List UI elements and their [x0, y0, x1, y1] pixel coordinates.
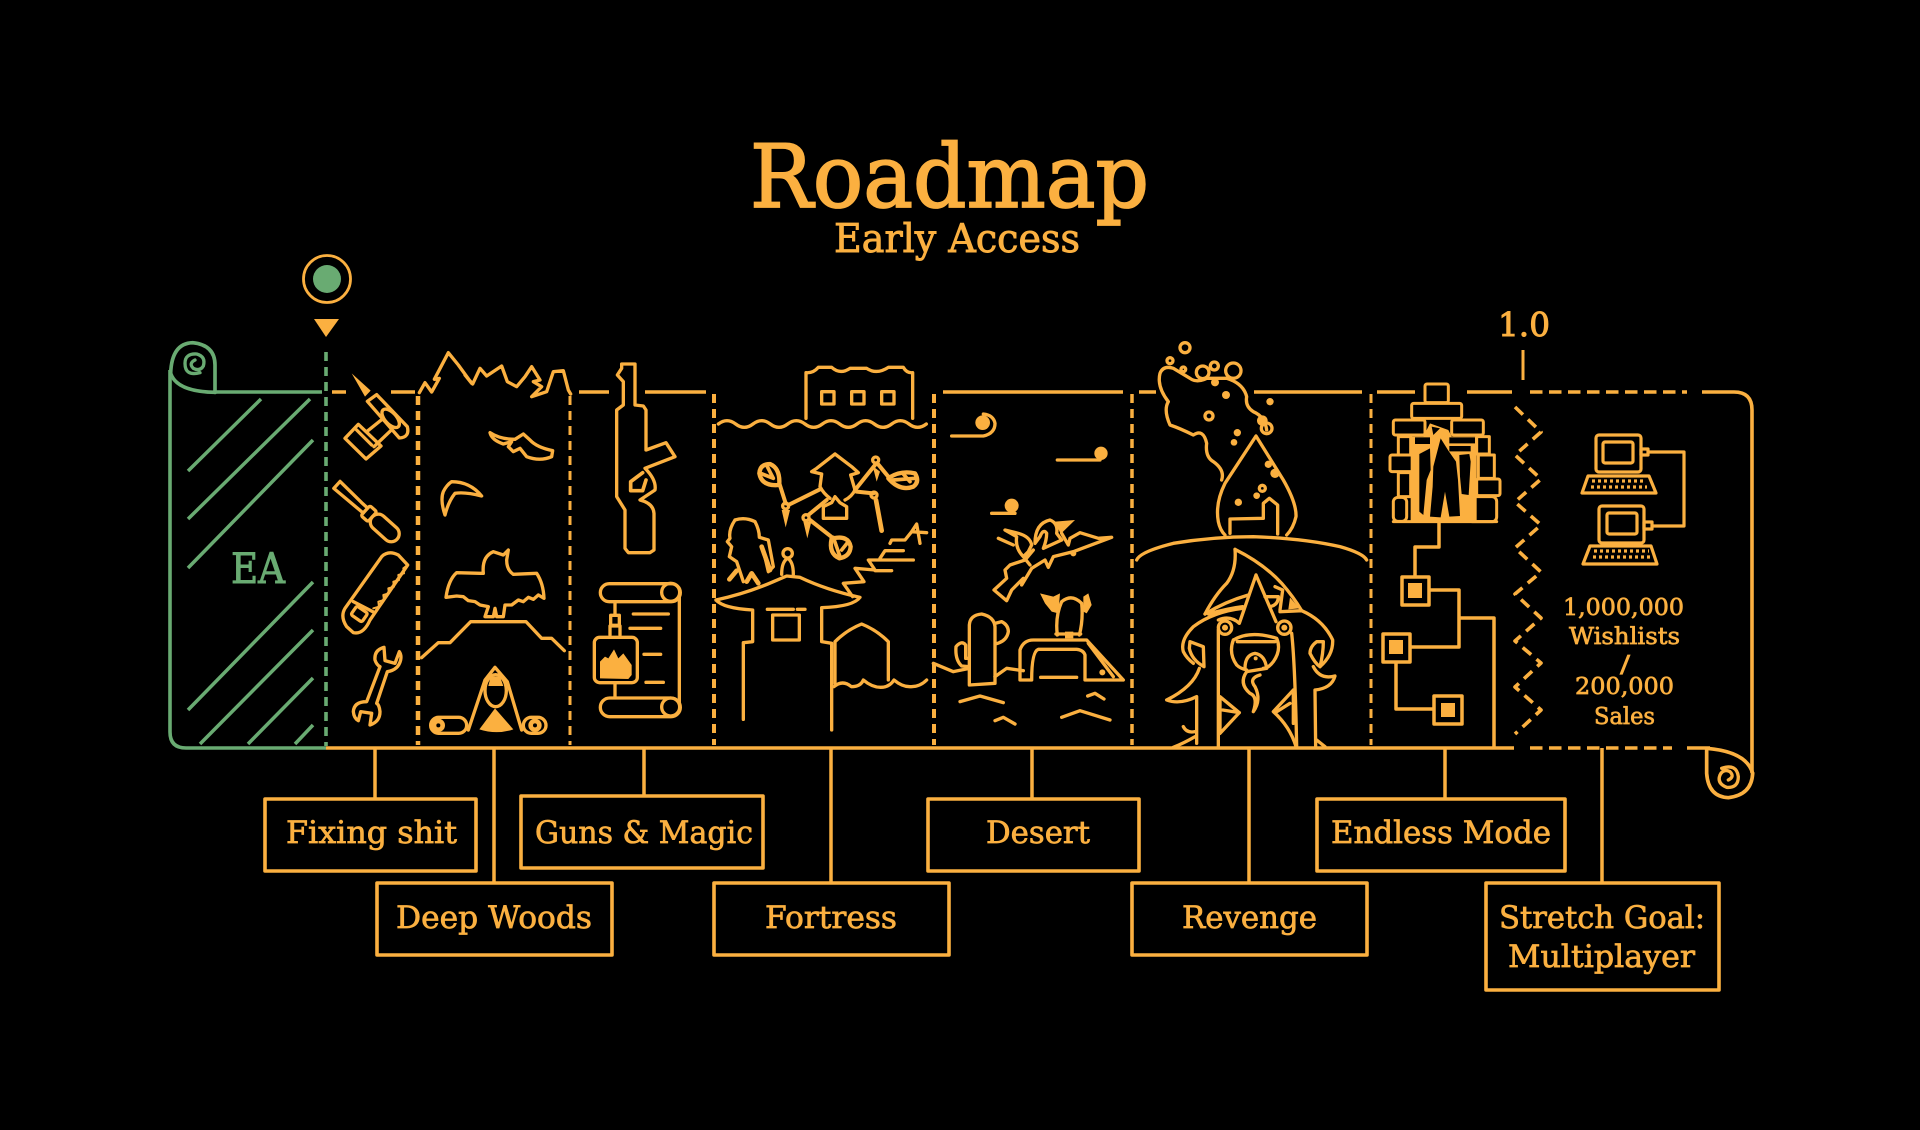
icon: hooded figure: [727, 519, 773, 583]
label: deep woods: [377, 883, 612, 955]
label: stretch goal multiplayer: Multiplayer: [1508, 939, 1695, 975]
label: guns and magic: Guns & Magic: [535, 815, 753, 851]
label: fortress: [714, 883, 949, 955]
subtitle: Early Access: [834, 217, 1080, 262]
icon: wind swirl 3: [992, 499, 1019, 513]
icon: scroll curl left: [171, 343, 215, 392]
panel: desert: [933, 414, 1123, 724]
main scroll outline: [326, 350, 1752, 773]
arch: [1137, 537, 1367, 560]
icon: flame: [1217, 436, 1296, 535]
icon: wrench: [353, 647, 401, 725]
icon: throne: [1230, 498, 1278, 534]
icon: saw: [343, 553, 408, 633]
icon: drill: [345, 373, 408, 459]
text: sales goals: Sales: [1594, 702, 1655, 730]
treeline: [419, 353, 571, 397]
icon: flying creature with riders: [994, 520, 1112, 601]
text: sales goals: [1563, 593, 1684, 730]
stairs: [843, 524, 927, 597]
label: revenge: [1132, 883, 1367, 955]
icon: scroll curl right: [1707, 748, 1753, 798]
label: guns and magic: [521, 796, 763, 868]
panel: endless mode: [1383, 384, 1500, 748]
label connectors: [375, 748, 1602, 883]
icon: flying creature: [490, 433, 553, 459]
icon: castle: [806, 367, 913, 418]
icon: networked computers: [1582, 435, 1684, 564]
icon: stone ruin with dripping tree: [1390, 384, 1500, 522]
dunes: [960, 693, 1110, 724]
icon: meditating figure: [431, 667, 546, 733]
section dividers: [418, 394, 1371, 745]
hatching: [188, 399, 313, 744]
icon: pagoda gate: [716, 549, 860, 730]
label: stretch goal multiplayer: [1486, 883, 1719, 990]
label: fixing shit: Fixing shit: [286, 815, 458, 851]
title: Roadmap: [750, 126, 1149, 228]
icon: dune shelter and figure: [1020, 593, 1123, 680]
icon: boomerang: [442, 482, 482, 515]
label: revenge: Revenge: [1182, 900, 1317, 936]
panel: fortress: [716, 367, 927, 730]
text: sales goals: 1,000,000: [1563, 593, 1684, 621]
panel: fixing shit tools: [332, 373, 408, 725]
ground: [933, 663, 1023, 677]
panel: 1.0 release: [1563, 435, 1684, 730]
1.0 release marker: 1.0: [1498, 305, 1550, 344]
label: desert: [928, 799, 1139, 871]
label: fortress: Fortress: [765, 900, 897, 936]
text: sales goals: /: [1620, 650, 1630, 678]
icon: walking mech: [727, 454, 917, 583]
icon: cactus: [956, 614, 1008, 685]
icon: spell scroll: [594, 583, 680, 717]
panel: early access scroll: [170, 343, 326, 748]
panel: deep woods: [419, 353, 571, 733]
icon: rifle: [617, 364, 675, 553]
icon: witch: [1167, 549, 1335, 747]
label: deep woods: Deep Woods: [396, 900, 592, 936]
panel: revenge: [1137, 343, 1367, 560]
label: endless mode: [1317, 799, 1565, 871]
release zigzag divider: [1515, 407, 1541, 734]
label: fixing shit: [265, 799, 476, 871]
label: desert: Desert: [986, 815, 1091, 851]
skill tree: [1383, 522, 1494, 748]
text: sales goals: 200,000: [1575, 672, 1674, 700]
icon: vulture: [446, 550, 544, 617]
icon: smoke cloud and embers: [1159, 343, 1280, 506]
text: sales goals: Wishlists: [1569, 622, 1680, 650]
panel: guns and magic: [594, 364, 680, 717]
early access label: EA: [231, 544, 286, 593]
current position marker: [304, 256, 350, 337]
battlement wave: [718, 421, 926, 427]
icon: wind swirl 1: [952, 414, 995, 436]
icon: screwdriver: [332, 479, 402, 545]
icon: wind swirl 2: [1057, 447, 1108, 460]
icon: arch: [835, 624, 888, 683]
label: endless mode: Endless Mode: [1331, 815, 1551, 851]
hill: [422, 622, 564, 658]
label: stretch goal multiplayer: Stretch Goal:: [1499, 900, 1705, 936]
